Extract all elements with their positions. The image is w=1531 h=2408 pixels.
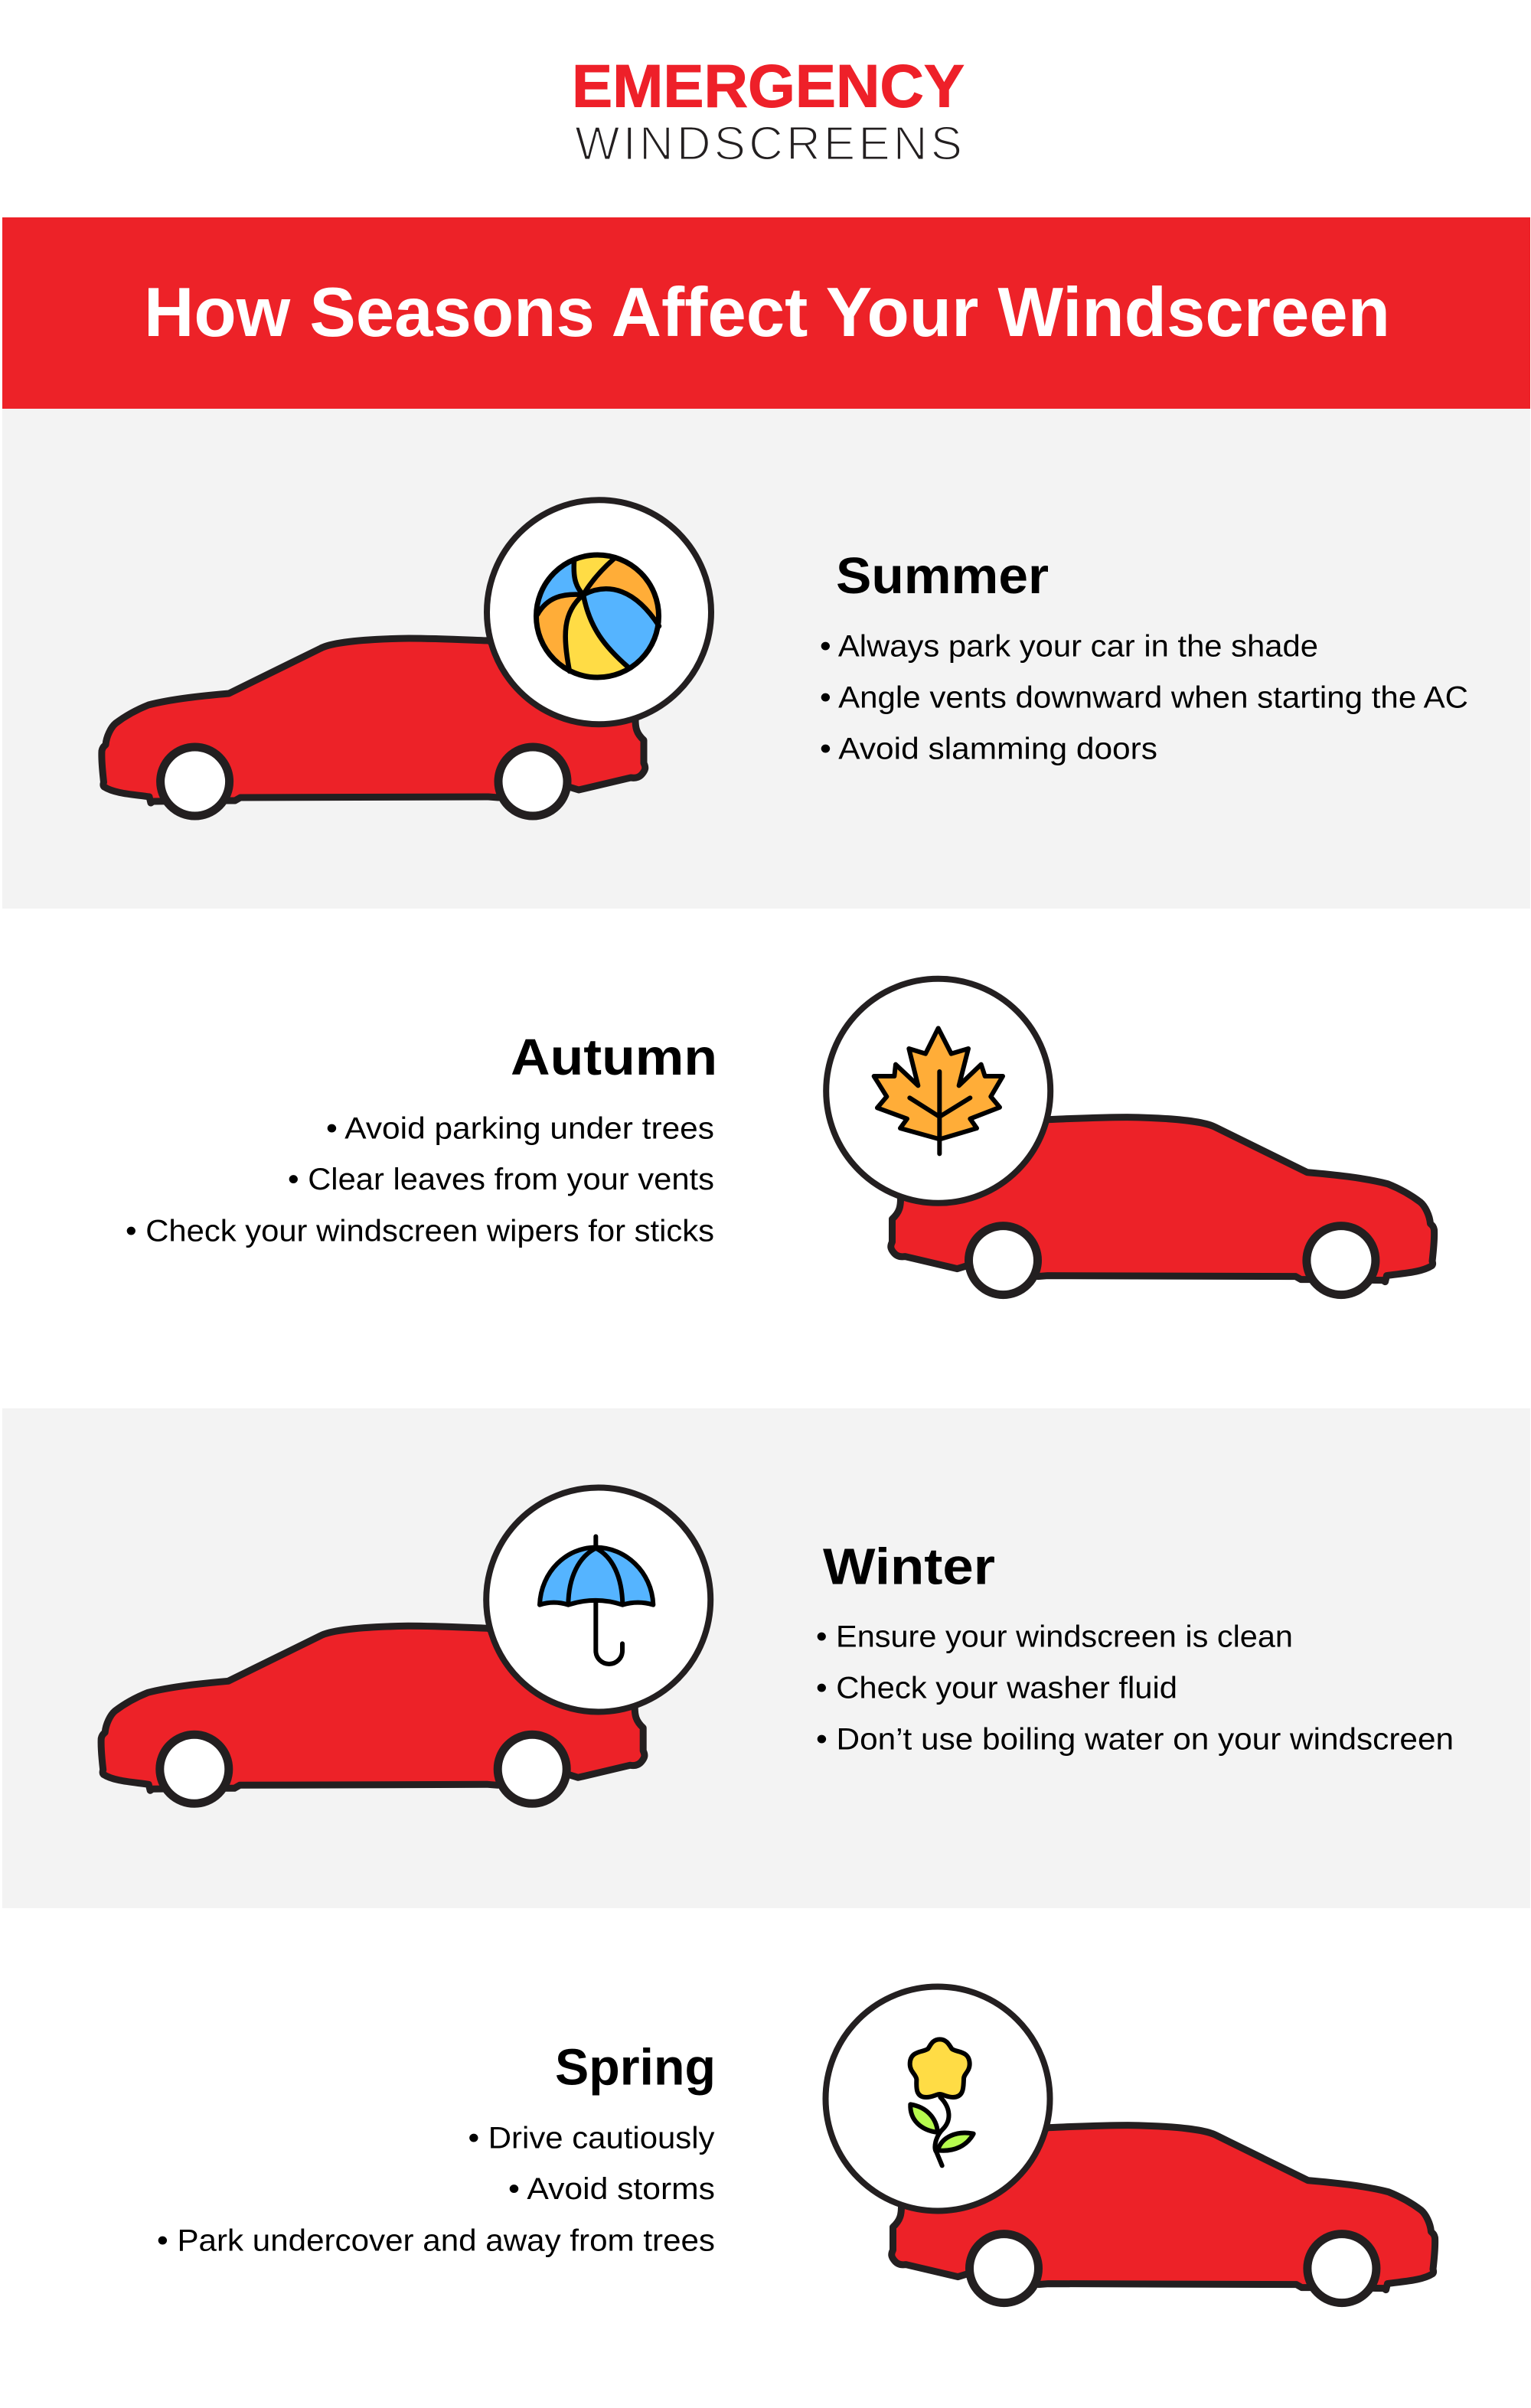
title banner bbox=[2, 217, 1530, 409]
heading: summer: Summer bbox=[836, 547, 1049, 605]
text block: spring: • Avoid storms bbox=[508, 2172, 715, 2206]
text block: spring: • Park undercover and away from trees bbox=[157, 2224, 715, 2258]
text block: spring: • Drive cautiously bbox=[468, 2122, 715, 2155]
text block: summer: • Avoid slamming doors bbox=[820, 733, 1157, 766]
panel: winter background bbox=[2, 1408, 1530, 1908]
text block: autumn bbox=[126, 1029, 717, 1248]
panel: summer background bbox=[2, 409, 1530, 909]
heading: spring: Spring bbox=[555, 2038, 716, 2096]
heading: autumn: Autumn bbox=[511, 1029, 717, 1086]
icon: umbrella badge bbox=[486, 1488, 710, 1711]
heading: winter: Winter bbox=[823, 1538, 995, 1595]
text block: winter bbox=[816, 1538, 1454, 1757]
icon: beach ball badge bbox=[487, 500, 711, 724]
text block: summer: • Always park your car in the shade bbox=[820, 630, 1318, 664]
text block: winter: • Don’t use boiling water on your windscreen bbox=[816, 1723, 1454, 1757]
text block: summer: • Angle vents downward when starting the AC bbox=[820, 680, 1468, 714]
text block: autumn: • Check your windscreen wipers for sticks bbox=[126, 1215, 714, 1248]
text block: autumn: • Avoid parking under trees bbox=[326, 1112, 714, 1146]
panel: autumn car bbox=[891, 1118, 1435, 1295]
title: How Seasons Affect Your Windscreen bbox=[144, 274, 1390, 351]
panel: winter car bbox=[101, 1626, 645, 1803]
icon: flower badge bbox=[825, 1987, 1050, 2211]
text block: autumn: • Clear leaves from your vents bbox=[288, 1163, 714, 1196]
text block: spring bbox=[157, 2038, 716, 2258]
panel: summer car bbox=[102, 638, 645, 816]
logo bbox=[572, 51, 965, 170]
icon: maple leaf badge bbox=[826, 979, 1050, 1203]
text block: winter: • Check your washer fluid bbox=[816, 1671, 1177, 1705]
panel: spring car bbox=[892, 2126, 1435, 2303]
text block: winter: • Ensure your windscreen is clean bbox=[816, 1620, 1293, 1654]
logo word: Windscreens: WINDSCREENS bbox=[575, 117, 962, 170]
text block: summer bbox=[820, 547, 1468, 766]
logo word: Emergency: EMERGENCY bbox=[572, 51, 965, 119]
